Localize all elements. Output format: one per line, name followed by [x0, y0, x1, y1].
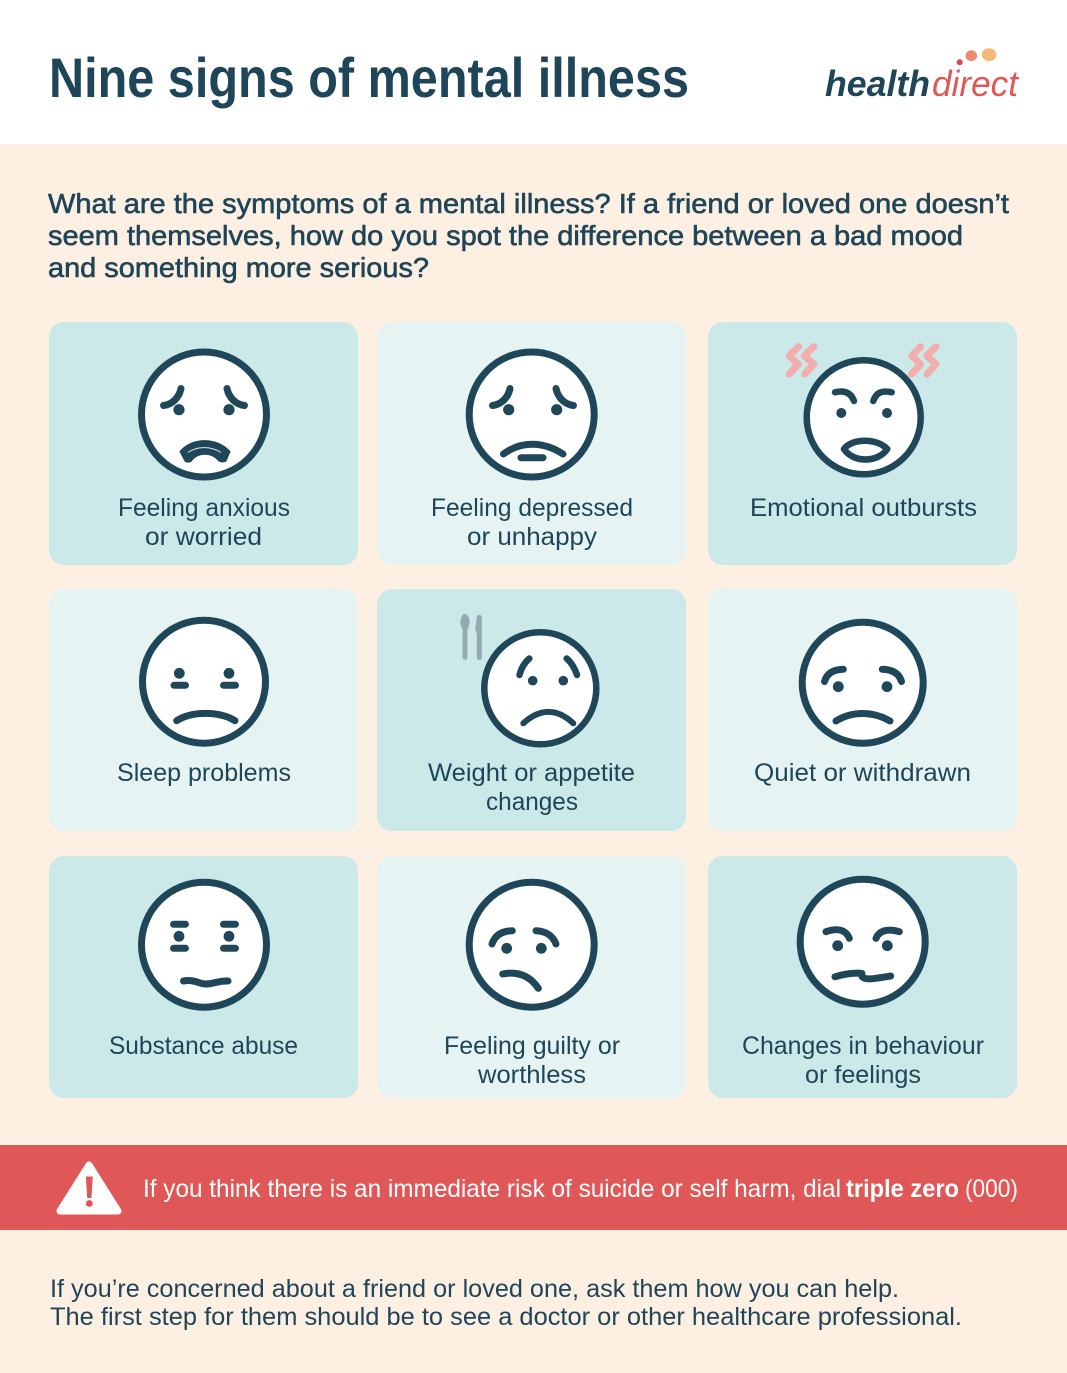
- intro text: What are the symptoms of a mental illness? If a friend or loved one doesn’t: [48, 188, 1009, 219]
- label: [428, 759, 635, 816]
- panel: quiet or withdrawn: [708, 589, 1017, 831]
- logo: healthdirect: direct: [932, 63, 1020, 104]
- icon: depressed face: [469, 352, 594, 477]
- panel: feeling depressed or unhappy: [377, 322, 686, 565]
- label: worthless: [477, 1061, 586, 1089]
- alert text: If you think there is an immediate risk of suicide or self harm, dial: [143, 1175, 841, 1203]
- closing advice text: [50, 1275, 962, 1331]
- label: Substance abuse: [109, 1032, 298, 1060]
- label: [431, 494, 633, 551]
- icon: dazed face: [142, 882, 266, 1007]
- label: Feeling depressed: [431, 494, 633, 522]
- label: Weight or appetite: [428, 759, 635, 787]
- alert text: triple zero: [846, 1175, 959, 1203]
- logo: healthdirect: [825, 48, 1020, 104]
- label: Emotional outbursts: [750, 494, 977, 522]
- icon: tired face: [142, 620, 266, 743]
- label: [118, 494, 290, 551]
- panel: sleep problems: [49, 589, 358, 831]
- label: Sleep problems: [117, 759, 291, 787]
- alert banner: [0, 1145, 1067, 1230]
- alert text: (000): [965, 1175, 1018, 1203]
- label: Quiet or withdrawn: [754, 759, 971, 787]
- label: or feelings: [805, 1061, 921, 1089]
- label: or unhappy: [467, 523, 598, 551]
- icon: guilty face: [469, 882, 594, 1007]
- label: Feeling anxious: [118, 494, 290, 522]
- icon: uneasy face: [800, 879, 925, 1004]
- label: [444, 1032, 620, 1089]
- panel: substance abuse: [49, 856, 358, 1098]
- title: Nine signs of mental illness: [49, 46, 689, 109]
- panel: feeling anxious or worried: [49, 322, 358, 565]
- label: Feeling guilty or: [444, 1032, 620, 1060]
- label: changes: [486, 788, 578, 816]
- label: or worried: [145, 523, 262, 551]
- icon: withdrawn face: [802, 622, 923, 743]
- icon: angry face: [807, 360, 921, 474]
- icon: sad face: [484, 632, 596, 744]
- panel: emotional outbursts: [708, 322, 1017, 565]
- logo: healthdirect: health: [825, 63, 930, 104]
- intro text: [48, 188, 1009, 283]
- icon: fork and knife: [460, 614, 482, 660]
- panel: weight or appetite changes: [377, 589, 686, 831]
- icon: steam marks: [789, 347, 936, 374]
- intro text: seem themselves, how do you spot the difference between a bad mood: [48, 220, 963, 251]
- panel: changes in behaviour or feelings: [708, 856, 1017, 1098]
- label: [742, 1032, 984, 1089]
- panel: feeling guilty or worthless: [377, 856, 686, 1098]
- icon: anxious face: [142, 352, 266, 477]
- intro text: and something more serious?: [48, 252, 429, 283]
- header band: [0, 0, 1067, 144]
- icon: warning triangle: [60, 1165, 118, 1211]
- closing advice text: If you’re concerned about a friend or loved one, ask them how you can help.: [50, 1275, 899, 1303]
- label: Changes in behaviour: [742, 1032, 984, 1060]
- closing advice text: The first step for them should be to see a doctor or other healthcare professional.: [50, 1303, 962, 1331]
